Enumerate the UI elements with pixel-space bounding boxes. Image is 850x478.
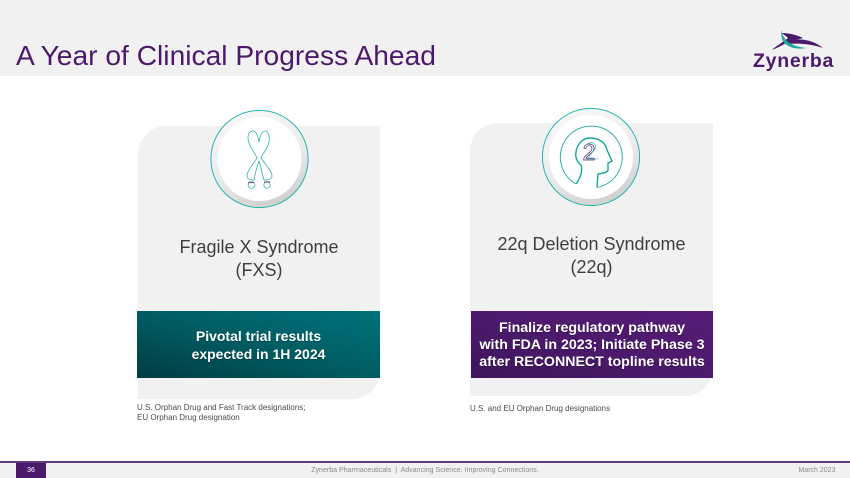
note: FXS designations bbox=[137, 403, 306, 422]
heading: Fragile X Syndrome (FXS): (FXS) bbox=[236, 260, 282, 280]
logo swoosh mark bbox=[772, 30, 823, 50]
page number bbox=[16, 463, 46, 478]
callout: FXS pivotal trial bbox=[137, 311, 380, 378]
icon: chromosome in circle bbox=[210, 110, 309, 208]
heading: 22q Deletion Syndrome (22q): (22q) bbox=[570, 256, 613, 276]
callout: FXS pivotal trial: expected in 1H 2024 bbox=[192, 346, 325, 362]
note: FXS designations: EU Orphan Drug designation bbox=[137, 413, 240, 422]
callout: FXS pivotal trial: Pivotal trial results bbox=[196, 328, 321, 344]
icon: head in circle: 2 bbox=[583, 139, 595, 165]
header bar bbox=[0, 0, 850, 76]
footer tagline: Zynerba Pharmaceuticals | Advancing Science. Improving Connections. bbox=[311, 467, 539, 474]
heading: 22q Deletion Syndrome (22q): 22q Deletion Syndrome bbox=[497, 234, 686, 254]
heading: 22q Deletion Syndrome (22q) bbox=[497, 234, 686, 277]
callout: 22q regulatory pathway: Finalize regulatory pathway bbox=[499, 320, 685, 336]
footer date: March 2023 bbox=[798, 467, 835, 474]
logo: Zynerba bbox=[753, 30, 834, 72]
title: A Year of Clinical Progress Ahead bbox=[16, 39, 436, 71]
note: 22q designations: U.S. and EU Orphan Drug designations bbox=[470, 404, 610, 413]
heading: Fragile X Syndrome (FXS) bbox=[179, 237, 339, 280]
logo wordmark: Zynerba bbox=[753, 50, 834, 72]
icon: head in circle bbox=[542, 108, 640, 206]
panel: 22q Deletion Syndrome bbox=[470, 123, 713, 396]
heading: Fragile X Syndrome (FXS): Fragile X Syndrome bbox=[179, 237, 339, 257]
footer bar bbox=[0, 461, 850, 478]
callout: 22q regulatory pathway: after RECONNECT topline results bbox=[479, 354, 705, 370]
callout: 22q regulatory pathway bbox=[471, 311, 713, 378]
page number: 36 bbox=[27, 467, 35, 474]
callout: 22q regulatory pathway: with FDA in 2023; Initiate Phase 3 bbox=[480, 337, 704, 353]
panel: Fragile X Syndrome bbox=[138, 126, 380, 399]
note: FXS designations: U.S. Orphan Drug and Fast Track designations; bbox=[137, 403, 306, 412]
